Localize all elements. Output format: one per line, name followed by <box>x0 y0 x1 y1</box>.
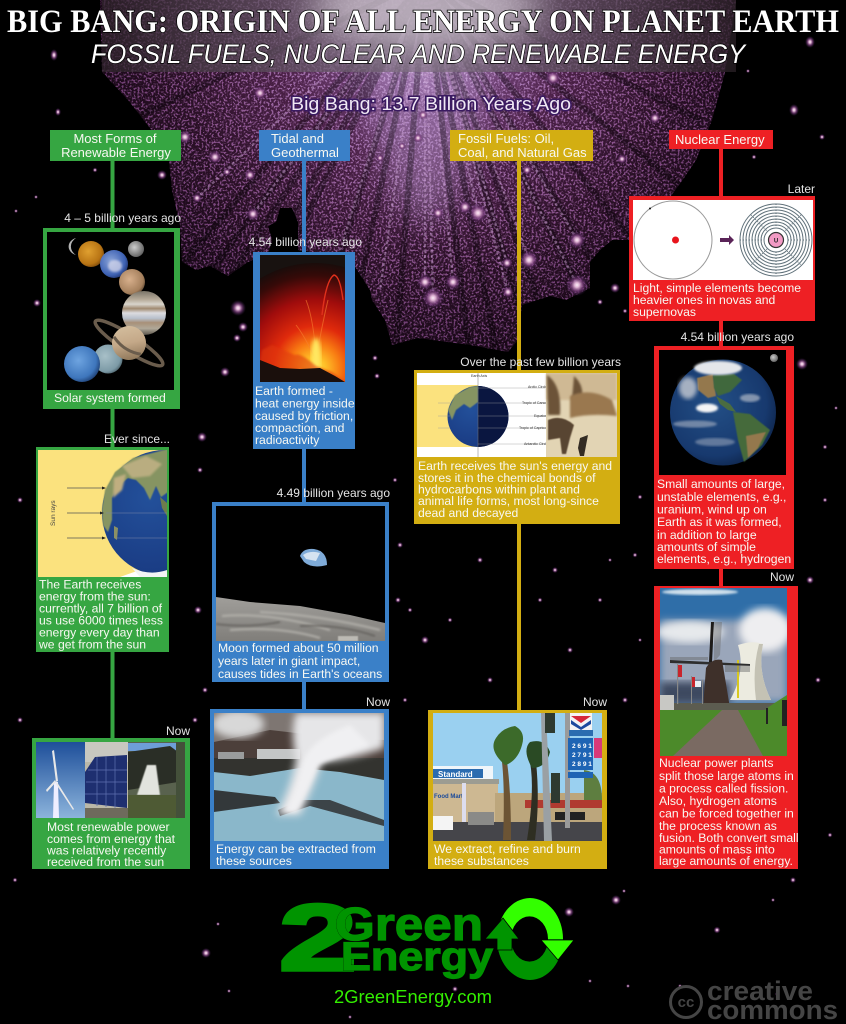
image: gas station <box>433 713 602 841</box>
caption: hydrocarbons within plant and <box>418 482 580 496</box>
image: earth diagram and dinosaurs: Tropic of Cancer <box>522 401 549 405</box>
logo: 2GreenEnergy: Green <box>335 898 483 950</box>
column heading: fossil fuels: Fossil Fuels: Oil, <box>458 131 554 146</box>
time labels: Now <box>770 570 794 584</box>
image: earth diagram and dinosaurs: Tropic of Capricorn <box>519 426 549 430</box>
caption: supernovas <box>633 305 696 319</box>
caption <box>418 459 612 520</box>
panel: earth receives energy <box>36 447 228 652</box>
caption: large amounts of energy. <box>659 854 793 868</box>
caption: Most renewable power <box>47 820 170 834</box>
panel: earth formed <box>210 252 420 473</box>
caption: currently, all 7 billion of <box>39 602 163 616</box>
image: earth and sun rays: Sun rays <box>50 500 57 526</box>
caption: we get from the sun <box>38 638 146 652</box>
caption <box>659 756 799 868</box>
image: earth and sun rays <box>38 450 167 577</box>
column heading: tidal and geothermal: Geothermal <box>271 145 339 160</box>
caption: heat energy inside <box>255 396 355 410</box>
column heading: tidal and geothermal: Tidal and <box>271 131 324 146</box>
time labels: Now <box>166 724 190 738</box>
image: planets <box>47 232 174 390</box>
caption: caused by friction, <box>255 409 353 423</box>
caption: Moon formed about 50 million <box>218 641 379 655</box>
caption: Light, simple elements become <box>633 281 801 295</box>
image: gas station: 2 7 9 1 <box>572 752 592 759</box>
logo: 2GreenEnergy: Energy <box>341 935 494 979</box>
caption <box>216 842 376 868</box>
caption: energy every day than <box>39 626 160 640</box>
time labels: Now <box>366 695 390 709</box>
caption: a process called fission. <box>659 782 788 796</box>
logo: 2GreenEnergy: Green <box>335 898 483 950</box>
image: earthrise over moon <box>216 506 385 641</box>
caption: Energy can be extracted from <box>216 842 376 856</box>
caption: amounts of mass into <box>659 842 775 856</box>
logo: 2GreenEnergy: Energy <box>341 935 494 979</box>
caption: We extract, refine and burn <box>434 842 581 856</box>
caption: years later in giant impact, <box>218 654 360 668</box>
icon: recycle arrows <box>485 898 574 980</box>
panel: solar system formed <box>43 228 180 409</box>
image: earth diagram and dinosaurs: Antarctic Circle <box>524 442 548 446</box>
panel: renewable power now <box>32 738 190 869</box>
caption <box>255 384 355 447</box>
caption: split those large atoms in <box>659 769 794 783</box>
caption: Solar system formed <box>54 391 166 405</box>
column heading: nuclear <box>669 130 773 149</box>
image: atom diagrams: U <box>774 238 778 244</box>
caption: the process known as <box>659 819 777 833</box>
panel: unstable elements on earth <box>654 346 794 569</box>
creative commons mark <box>670 976 838 1024</box>
image: atom diagrams <box>633 200 813 280</box>
image: earth diagram and dinosaurs: Equator <box>534 414 547 418</box>
caption: heavier ones in novas and <box>633 293 775 307</box>
caption: Also, hydrogen atoms <box>659 794 777 808</box>
time labels: 4 – 5 billion years ago <box>64 211 181 225</box>
time labels: 4.54 billion years ago <box>249 235 362 249</box>
caption: energy from the sun: <box>39 590 151 604</box>
column heading: renewable <box>50 130 181 161</box>
image: gas station: Standard <box>438 770 473 779</box>
caption <box>633 281 801 319</box>
big bang burst <box>100 0 736 379</box>
panel: fossil fuels now <box>428 710 607 869</box>
column heading: fossil fuels: Coal, and Natural Gas <box>458 145 587 160</box>
caption: Earth as it was formed, <box>657 515 782 529</box>
big bang date: Big Bang: 13.7 Billion Years Ago <box>291 94 571 114</box>
caption: dead and decayed <box>418 506 518 520</box>
caption: us use 6000 times less <box>39 614 163 628</box>
subtitle: FOSSIL FUELS, NUCLEAR AND RENEWABLE ENERGY <box>91 39 747 69</box>
image: earth diagram and dinosaurs: Arctic Circle <box>528 385 547 389</box>
time labels: Ever since... <box>104 432 170 446</box>
caption: was relatively recently <box>46 844 167 858</box>
panel: geothermal now <box>210 709 389 869</box>
image: gas station: 2 6 9 1 <box>572 743 592 750</box>
caption: animal life forms, most long-since <box>418 494 599 508</box>
title glow <box>315 0 535 48</box>
caption: causes tides in Earth's oceans <box>218 667 382 681</box>
time labels: Over the past few billion years <box>460 355 621 369</box>
caption: elements, e.g., hydrogen <box>657 552 791 566</box>
caption: stores it in the chemical bonds of <box>418 471 596 485</box>
logo: 2GreenEnergy: 2 <box>279 885 357 990</box>
caption: Small amounts of large, <box>657 477 785 491</box>
caption: these sources <box>216 854 292 868</box>
creative commons mark: creative <box>707 976 813 1006</box>
column heading: tidal and geothermal <box>259 130 350 161</box>
logo: 2GreenEnergy <box>279 885 574 990</box>
time labels: 4.54 billion years ago <box>681 330 794 344</box>
panel: moon formed <box>212 502 389 682</box>
image: geothermal steam and lagoon <box>214 713 384 841</box>
caption: Earth receives the sun's energy and <box>418 459 612 473</box>
image: windmill and cooling tower <box>660 588 787 756</box>
caption <box>657 477 791 566</box>
caption: uranium, wind up on <box>657 502 767 516</box>
caption: Nuclear power plants <box>659 756 773 770</box>
connector lines <box>112 148 721 738</box>
caption: Earth formed - <box>255 384 333 398</box>
column heading: fossil fuels <box>450 130 593 161</box>
website link: 2GreenEnergy.com <box>334 987 492 1007</box>
caption: can be forced together in <box>659 806 794 820</box>
caption: fusion. Both convert small <box>659 831 799 845</box>
caption <box>434 842 581 868</box>
caption: The Earth receives <box>39 578 141 592</box>
image: gas station: Food Mart <box>434 794 463 800</box>
caption <box>218 641 382 681</box>
caption: these substances <box>434 854 529 868</box>
time labels: Now <box>583 695 607 709</box>
caption <box>38 578 163 652</box>
caption: amounts of simple <box>657 540 756 554</box>
caption: radioactivity <box>255 433 320 447</box>
time labels: 4.49 billion years ago <box>277 486 390 500</box>
time labels: Later <box>788 182 815 196</box>
caption: in addition to large <box>657 528 757 542</box>
image: volcano eruption <box>260 255 345 382</box>
caption: unstable elements, e.g., <box>657 490 786 504</box>
caption: received from the sun <box>47 855 164 869</box>
image: earth diagram and dinosaurs <box>417 373 617 457</box>
creative commons mark: cc <box>678 994 694 1011</box>
caption: comes from energy that <box>47 832 176 846</box>
image: wind turbine, solar panels and dam <box>36 742 185 818</box>
caption <box>46 820 176 869</box>
column heading: renewable: Most Forms of <box>73 131 157 146</box>
column heading: nuclear: Nuclear Energy <box>675 132 765 147</box>
panel: heavier elements <box>629 196 815 321</box>
time labels <box>64 182 815 738</box>
title band <box>102 0 736 72</box>
panel: earth stores sun energy <box>414 370 620 524</box>
image: earth from space <box>659 350 786 475</box>
panel: nuclear power now <box>654 586 799 869</box>
image: earth diagram and dinosaurs: Earth Axis <box>471 374 487 378</box>
image: gas station: 2 8 9 1 <box>572 761 592 768</box>
caption: compaction, and <box>255 421 344 435</box>
column heading: renewable: Renewable Energy <box>61 145 171 160</box>
